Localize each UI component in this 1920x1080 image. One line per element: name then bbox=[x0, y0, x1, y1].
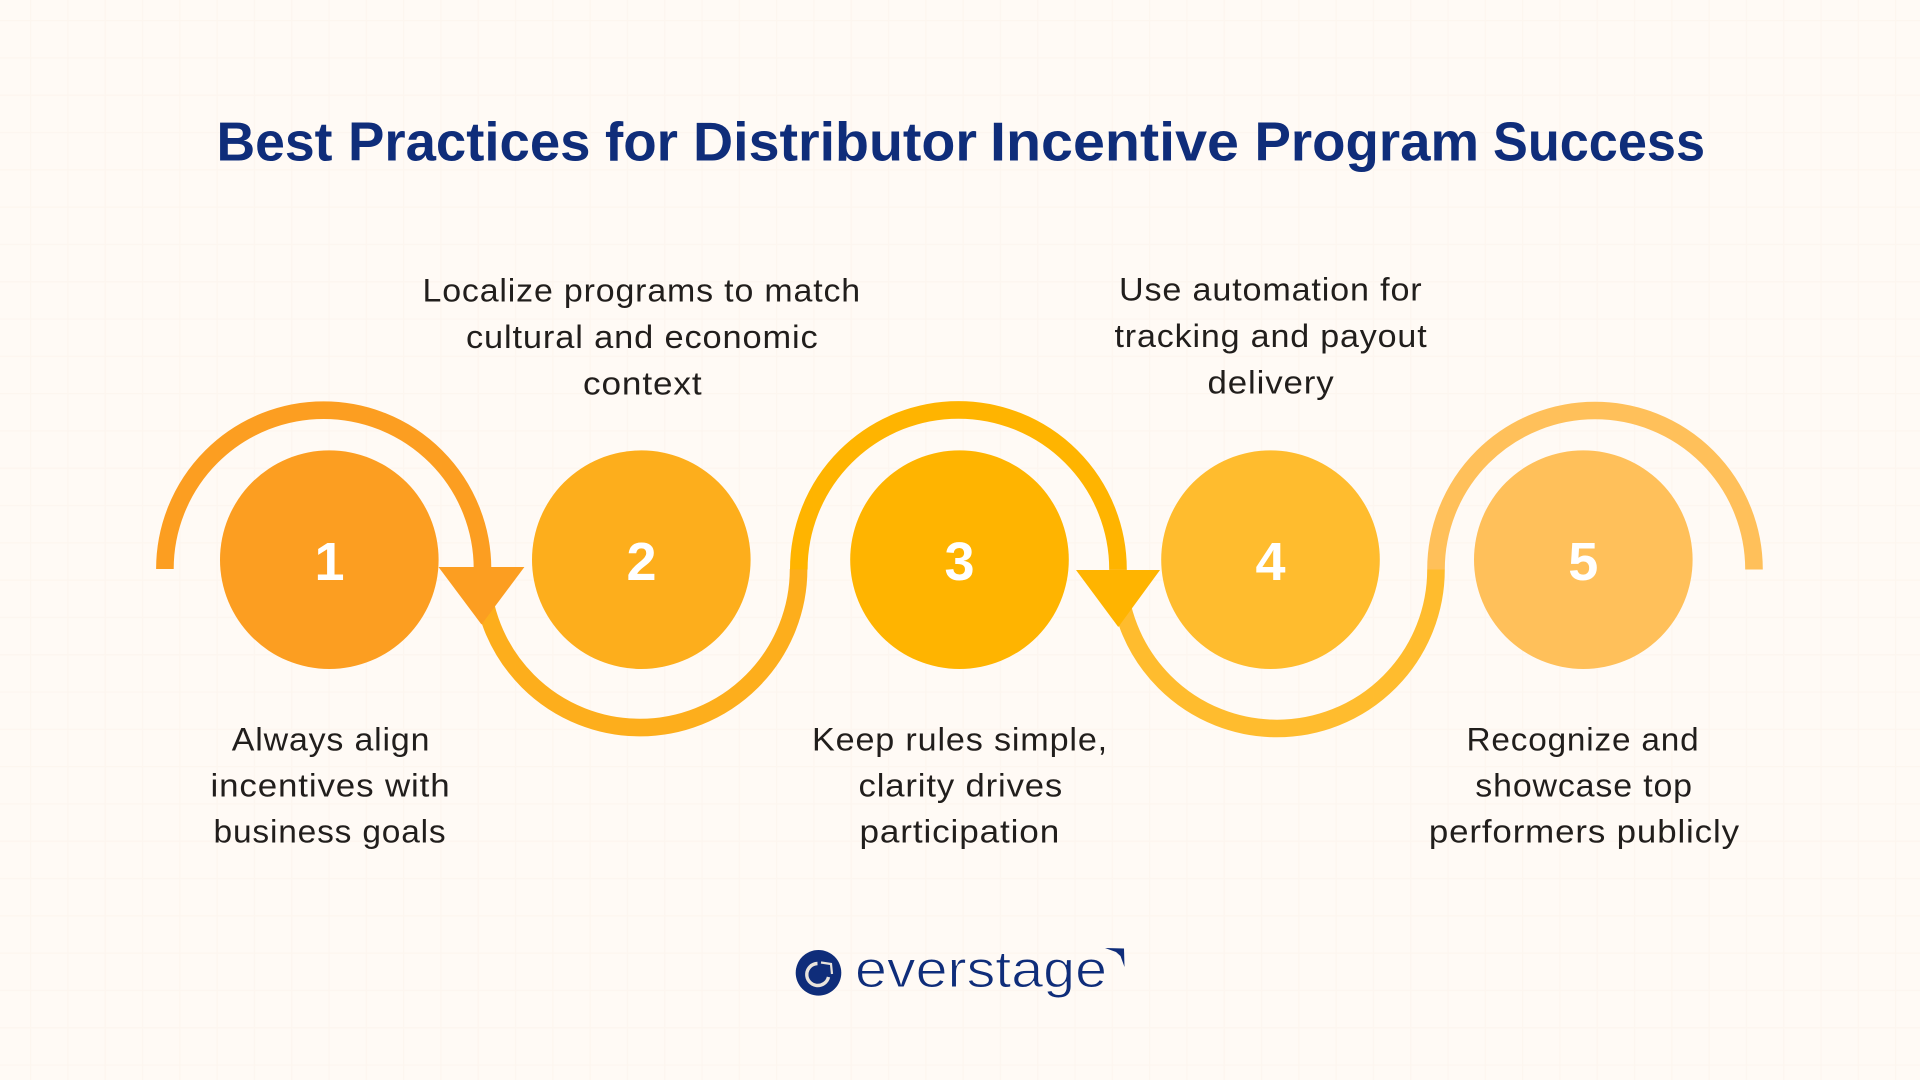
step 1 circle: 1 bbox=[314, 532, 345, 592]
step 4 circle: 4 bbox=[1255, 532, 1286, 592]
text: step 2: cultural and economic bbox=[466, 319, 818, 355]
step 4 circle bbox=[1161, 450, 1380, 669]
connector arc 1 with arrow bbox=[165, 410, 524, 624]
title: Incentive bbox=[990, 112, 1239, 173]
connector arc 2 (bottom) bbox=[481, 569, 799, 728]
text: step 3: participation bbox=[860, 814, 1060, 850]
icon: logo mark bbox=[796, 950, 841, 996]
connector arc 5 bbox=[1436, 410, 1754, 570]
text: step 2 bbox=[422, 273, 861, 401]
text: step 5: performers publicly bbox=[1429, 814, 1740, 850]
title: Program bbox=[1254, 112, 1479, 173]
text: step 1: business goals bbox=[214, 814, 446, 850]
logo: everstage bbox=[796, 941, 1124, 999]
title: Practices bbox=[348, 112, 590, 173]
text: step 4: Use automation for bbox=[1119, 272, 1422, 308]
step 2 circle: 2 bbox=[626, 532, 657, 592]
text: step 3: clarity drives bbox=[858, 768, 1063, 804]
title bbox=[216, 112, 1705, 173]
title: Success bbox=[1493, 112, 1705, 173]
text: step 5: Recognize and bbox=[1466, 722, 1700, 758]
text: step 1 bbox=[210, 722, 450, 850]
title: Distributor bbox=[693, 112, 977, 173]
text: step 4: delivery bbox=[1208, 364, 1334, 400]
step 3 circle bbox=[850, 450, 1069, 669]
text: step 4: tracking and payout bbox=[1114, 318, 1428, 354]
step 3 circle: 3 bbox=[944, 532, 975, 592]
title: for bbox=[605, 112, 678, 173]
text: step 4 bbox=[1114, 272, 1428, 400]
text: step 1: incentives with bbox=[210, 768, 450, 804]
text: step 3 bbox=[812, 722, 1108, 850]
step 2 circle bbox=[532, 450, 751, 669]
connector arc 3 with arrow bbox=[799, 410, 1160, 627]
text: step 5 bbox=[1429, 722, 1740, 850]
text: step 2: context bbox=[583, 365, 702, 401]
logo tick bbox=[1105, 948, 1124, 967]
step 5 circle bbox=[1474, 450, 1693, 669]
step 5 circle: 5 bbox=[1568, 532, 1598, 592]
text: step 1: Always align bbox=[232, 722, 430, 758]
title: Best bbox=[216, 112, 332, 173]
logo wordmark: everstage bbox=[855, 941, 1107, 999]
text: step 3: Keep rules simple, bbox=[812, 722, 1108, 758]
connector arc 4 (bottom) bbox=[1118, 570, 1436, 728]
text: step 5: showcase top bbox=[1475, 768, 1693, 804]
step 1 circle bbox=[220, 450, 439, 669]
text: step 2: Localize programs to match bbox=[422, 273, 861, 309]
